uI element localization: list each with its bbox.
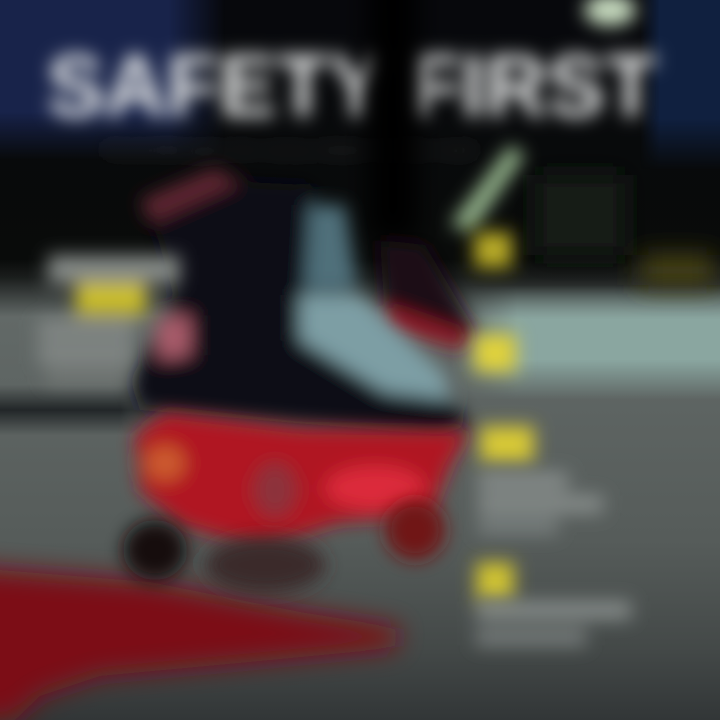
yellow marker 2 xyxy=(474,334,516,372)
right text block 1 xyxy=(478,472,603,534)
subtitle: Essential gear for every skater on the road xyxy=(105,142,475,159)
distant yellow glow xyxy=(640,255,715,285)
lit road on right xyxy=(450,285,720,400)
red road reflection xyxy=(0,566,400,720)
skate boot xyxy=(130,168,470,435)
yellow marker 1 xyxy=(474,232,512,268)
tree glow xyxy=(535,175,625,255)
yellow label xyxy=(76,283,146,315)
dark strip on left road xyxy=(0,388,150,432)
skater leg xyxy=(368,0,418,240)
second skate behind xyxy=(380,240,475,350)
left callout xyxy=(38,255,180,384)
title: SAFETY FIRST xyxy=(47,36,657,135)
street lamp glow xyxy=(584,0,636,26)
yellow marker 4 xyxy=(476,562,514,600)
yellow marker 3 xyxy=(480,426,534,462)
top right sky xyxy=(640,0,720,170)
green light streak xyxy=(450,145,525,232)
top left sky xyxy=(0,0,225,160)
red wheel base xyxy=(135,412,470,548)
right text block 2 xyxy=(476,601,631,646)
wheels xyxy=(123,500,445,593)
